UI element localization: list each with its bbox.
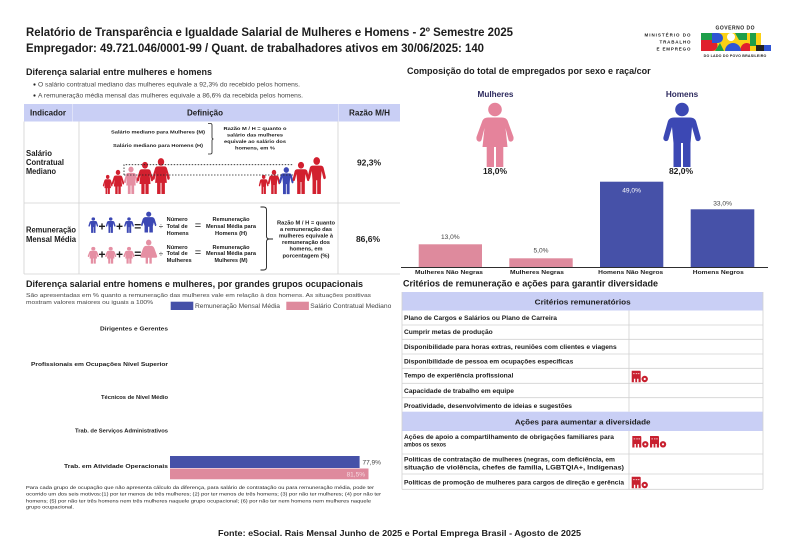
icon group: homens (259, 157, 326, 194)
row label: salário contratual mediano: Mediano (26, 167, 56, 176)
bar chart: sexo e raça/cor: 33,0% (713, 200, 732, 207)
panel: critérios table: situação de violência, chefes de família, LGBTQIA+, Indígenas) (404, 465, 624, 471)
icon: ações de apoio 1 (632, 436, 648, 448)
row label: salário contratual mediano (26, 149, 64, 176)
logo: governo do brasil: GOVERNO DO (716, 26, 755, 32)
header: critérios remuneratórios (402, 292, 763, 310)
bar chart: grupos ocupacionais: Técnicos de Nível Médio (101, 395, 169, 401)
definition text: salário mediano: Salário mediano para Homens (H) (113, 143, 203, 149)
logo: ministério: MINISTÉRIO DO (644, 30, 691, 38)
text block: bullets (33, 82, 303, 100)
dotted comparison lines (124, 165, 293, 175)
equation: mulheres: Remuneração (212, 245, 250, 251)
heading: grupos ocupacionais: Diferença salarial entre homens e mulheres, por grandes grupos ocupacionais (26, 279, 363, 290)
bar: homens negros (691, 209, 754, 267)
table header (24, 104, 400, 122)
panel: critérios table: Tempo de experiência profissional (404, 373, 514, 379)
table header: Indicador (30, 108, 66, 118)
heading: composição: Composição do total de empregados por sexo e raça/cor (407, 66, 651, 76)
definition text: razão remuneração: porcentagem (%) (282, 253, 330, 259)
panel: critérios table: Políticas de promoção de mulheres para cargos de direção e gerência (404, 481, 625, 487)
panel: critérios table: Disponibilidade de pessoa em ocupações específicas (404, 359, 574, 365)
definition text: razão remuneração (277, 220, 335, 259)
bar chart: grupos ocupacionais: 81,5% (347, 472, 365, 478)
footnote: ocorrido um dos seis motivos:(1) por ter menos de três mulheres; (2) por ter menos de três homens; (3) por não ter mulheres; (4) por não ter (26, 492, 381, 498)
equation: homens: + (116, 220, 123, 234)
equation: mulheres: Mensal Média para (206, 251, 256, 257)
heading: diferença salarial: Diferença salarial entre mulheres e homens (26, 67, 212, 77)
bar chart: sexo e raça/cor: Homens Negros (693, 270, 744, 276)
footnote (26, 485, 381, 510)
equation: homens (88, 212, 256, 237)
bar chart: sexo e raça/cor: Mulheres Não Negras (415, 270, 483, 276)
icon: promoção (632, 477, 648, 488)
text block: explicação: mostram valores maiores ou iguais a 100% (26, 300, 153, 306)
title: Relatório de Transparência e Igualdade Salarial de Mulheres e Homens - 2º Semestre 2025 (26, 26, 513, 39)
bar chart: sexo e raça/cor: Homens Não Negros (598, 270, 663, 276)
equation: mulheres: = (134, 247, 141, 261)
bar chart: sexo e raça/cor: 5,0% (533, 247, 549, 254)
table header: Razão M/H (349, 108, 390, 118)
definition text: razão remuneração: Razão M / H = quanto (277, 220, 335, 226)
equation: homens: Remuneração (212, 217, 250, 223)
footnote: grupo ocupacional. (26, 504, 74, 510)
title: Empregador: 49.721.046/0001-99 / Quant. de trabalhadores ativos em 30/06/2025: 140 (26, 42, 484, 55)
equation: mulheres: + (98, 248, 106, 262)
definition text: razão (224, 126, 287, 152)
bar chart: sexo e raça/cor: 49,0% (622, 187, 641, 194)
row label: salário contratual mediano: Salário (26, 149, 52, 158)
footnote: homens; (5) por não ter três homens nem três mulheres naquele grupo ocupacional; (6) por não ter nem homens nem mulheres naquele (26, 498, 371, 504)
bar chart: sexo e raça/cor: Mulheres Negras (510, 270, 564, 276)
text block: bullets: O salário contratual mediano das mulheres equivale a 92,3% do recebido pelos homens. (38, 82, 300, 88)
panel: critérios table: ambos os sexos (404, 442, 447, 448)
equation: mulheres: Mulheres (M) (214, 258, 248, 264)
definition text: razão: salário das mulheres (227, 132, 283, 138)
panel: critérios table: Ações de apoio a compartilhamento de obrigações familiares para (404, 435, 615, 441)
bracket (260, 207, 273, 270)
equation: mulheres: Número (167, 245, 188, 251)
logo: ministério (644, 30, 691, 52)
text block: bullets: A remuneração média mensal das mulheres equivale a 86,6% da recebida pelos homens. (38, 94, 303, 100)
legend: Remuneração Mensal Média (195, 304, 281, 310)
pictogram: homens (663, 90, 701, 176)
equation: homens: + (98, 220, 106, 234)
bar: homens não negros (600, 182, 663, 267)
pictogram: homens: 82,0% (669, 166, 693, 176)
text block: explicação: São apresentadas em % quanto a remuneração das mulheres vale em relação à dos homens. As situações positivas (26, 293, 371, 299)
panel: critérios table: Cumprir metas de produção (404, 330, 493, 336)
definition text: razão remuneração: remuneração dos (282, 240, 330, 246)
equation: mulheres: + (116, 248, 123, 262)
equation: mulheres: = (195, 247, 201, 259)
row label: remuneração mensal média: Remuneração (26, 226, 76, 234)
equation: homens: Total de (167, 224, 188, 230)
pictogram: mulheres: 18,0% (483, 166, 507, 176)
legend (171, 302, 392, 310)
equation: homens: Mensal Média para (206, 224, 256, 230)
bar chart: sexo e raça/cor: 13,0% (441, 234, 460, 241)
definition text: razão: homens, em % (235, 146, 276, 152)
header: critérios remuneratórios: Critérios remuneratórios (535, 298, 631, 306)
equation: mulheres: ÷ (159, 250, 164, 258)
logo: governo do brasil: DO LADO DO POVO BRASILEIRO (704, 54, 767, 58)
heading: critérios: Critérios de remuneração e ações para garantir diversidade (403, 278, 658, 288)
header: ações para aumentar a diversidade (402, 412, 763, 431)
bar chart: grupos ocupacionais (31, 326, 381, 479)
equation: homens: Homens (167, 231, 189, 237)
equation: homens: = (134, 220, 141, 234)
panel: critérios table: Políticas de contratação de mulheres (negras, com deficiência, em (404, 457, 615, 463)
bar chart: grupos ocupacionais: Trab. em Atividade Operacionais (64, 464, 168, 470)
icon group: mulheres (103, 158, 170, 194)
row label: remuneração mensal média (26, 226, 77, 244)
bar: remuneração (170, 456, 360, 468)
logo: ministério: E EMPREGO (656, 46, 691, 52)
pictogram: homens: Homens (666, 90, 699, 99)
bar chart: grupos ocupacionais: Dirigentes e Gerentes (100, 326, 168, 332)
bar: salário (170, 468, 368, 479)
bracket (208, 124, 214, 154)
icon: ações de apoio 2 (650, 436, 666, 448)
value: 92,3%: 92,3% (357, 158, 381, 168)
bar chart: grupos ocupacionais: Profissionais em Ocupações Nível Superior (31, 362, 169, 368)
panel: indicator table (24, 104, 400, 274)
table header: Definição (187, 108, 223, 118)
equation: homens: = (195, 220, 201, 232)
definition text: razão: equivale ao salário dos (224, 139, 286, 145)
panel: critérios table: Plano de Cargos e Salários ou Plano de Carreira (404, 316, 558, 322)
bar chart: sexo e raça/cor (401, 182, 768, 276)
equation: homens: Homens (H) (215, 231, 247, 237)
bar chart: grupos ocupacionais: 77,9% (362, 460, 381, 466)
definition text: razão remuneração: a remuneração das (280, 227, 332, 233)
logo: governo do brasil (701, 26, 771, 58)
definition text: razão remuneração: mulheres equivale à (279, 233, 333, 239)
legend: Salário Contratual Mediano (310, 304, 392, 310)
bar: mulheres negras (509, 258, 573, 267)
panel: critérios table: Proatividade, desenvolvimento de ideias e sugestões (404, 404, 573, 410)
equation: mulheres: Mulheres (167, 258, 192, 264)
footer source: Fonte: eSocial. Rais Mensal Junho de 2025 e Portal Emprega Brasil - Agosto de 2025 (218, 528, 581, 538)
equation: mulheres (88, 240, 256, 264)
pictogram: mulheres (476, 90, 514, 176)
text block: explicação (26, 293, 371, 306)
value: 86,6%: 86,6% (356, 234, 380, 244)
bar chart: grupos ocupacionais: Trab. de Serviços Administrativos (75, 428, 168, 434)
definition text: razão: Razão M / H = quanto o (224, 126, 287, 132)
logo: ministério: TRABALHO (660, 40, 691, 44)
panel: critérios table: Disponibilidade para horas extras, reuniões com clientes e viagens (404, 345, 617, 351)
bar: mulheres não negras (419, 244, 482, 267)
row label: salário contratual mediano: Contratual (26, 158, 64, 167)
panel: critérios table (402, 292, 763, 489)
equation: mulheres: Total de (167, 251, 188, 257)
definition text: razão remuneração: homens, em (290, 247, 323, 253)
title (26, 26, 513, 55)
definition text: salário mediano (111, 130, 205, 149)
panel: critérios table: Capacidade de trabalho em equipe (404, 389, 515, 395)
definition text: salário mediano: Salário mediano para Mulheres (M) (111, 130, 205, 136)
pictogram: mulheres: Mulheres (478, 90, 514, 99)
row label: remuneração mensal média: Mensal Média (26, 235, 77, 244)
equation: homens: Número (167, 217, 188, 223)
footnote: Para cada grupo de ocupação que não apresenta cálculo da diferença, para salário de contratação ou para remuneração média, pode ter (26, 485, 374, 491)
equation: homens: ÷ (159, 222, 164, 231)
header: ações para aumentar a diversidade: Ações para aumentar a diversidade (515, 418, 651, 426)
icon: tempo de experiência (632, 371, 648, 382)
